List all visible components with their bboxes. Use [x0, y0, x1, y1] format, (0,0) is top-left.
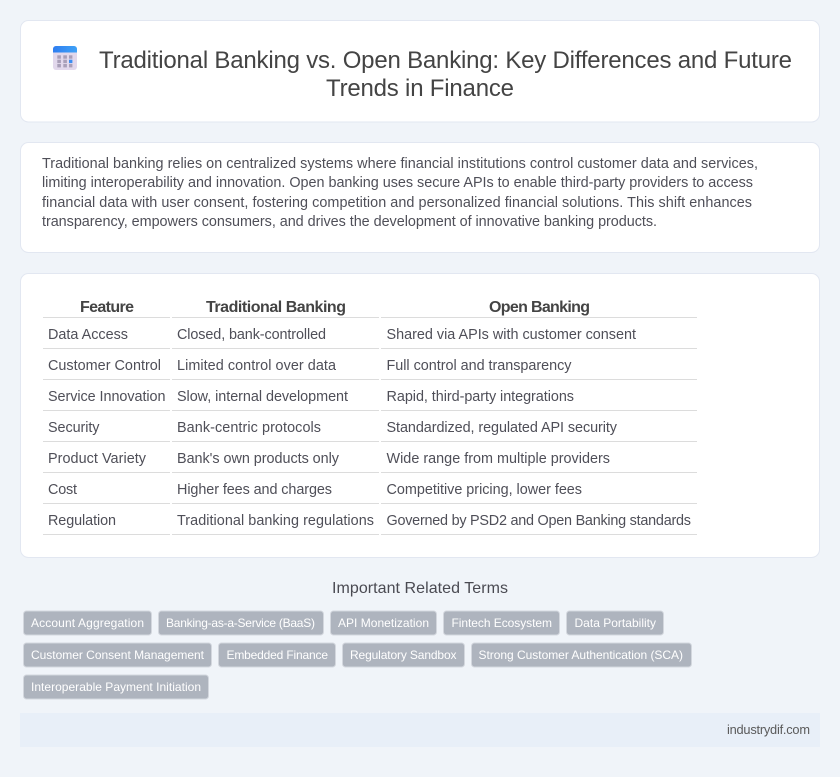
- row: Regulation: Governed by PSD2 and Open Banking standards: [386, 513, 691, 529]
- row: Product Variety: Product Variety: [48, 451, 147, 467]
- row: Security: Standardized, regulated API security: [386, 420, 618, 436]
- row: Regulation: Traditional banking regulations: [177, 513, 374, 529]
- row: Regulation: Regulation: [48, 513, 116, 529]
- heading: related terms: Important Related Terms: [332, 580, 508, 597]
- title: Trends in Finance: [326, 75, 514, 102]
- panel: summary paragraph: [20, 142, 820, 252]
- table header: Open Banking: [489, 299, 590, 316]
- tag: Banking-as-a-Service: Banking-as-a-Service (BaaS): [166, 616, 315, 630]
- row: Service Innovation: [43, 389, 697, 411]
- tag: Embedded Finance: [218, 643, 336, 667]
- row: Service Innovation: Slow, internal development: [177, 389, 348, 405]
- tag: Regulatory Sandbox: Regulatory Sandbox: [350, 648, 456, 662]
- row: Product Variety: [43, 451, 697, 473]
- tag: Fintech Ecosystem: Fintech Ecosystem: [452, 616, 552, 630]
- table header: Traditional Banking: [206, 299, 346, 316]
- summary text: limiting interoperability and innovation. Open banking uses secure APIs to enable third-party providers to access: [42, 175, 753, 191]
- row: Data Access: Shared via APIs with customer consent: [386, 327, 636, 343]
- tag: Strong Customer Authentication: Strong Customer Authentication (SCA): [478, 648, 683, 662]
- row: Cost: Competitive pricing, lower fees: [386, 482, 582, 498]
- row: Service Innovation: Rapid, third-party integrations: [386, 389, 574, 405]
- row: Cost: [43, 482, 697, 504]
- tag: Embedded Finance: Embedded Finance: [226, 648, 328, 662]
- tag: Customer Consent Management: Customer Consent Management: [31, 648, 205, 662]
- row: Data Access: [43, 327, 697, 349]
- row: Cost: Cost: [48, 482, 77, 498]
- panel: comparison table: [20, 274, 820, 558]
- row: Cost: Higher fees and charges: [177, 482, 332, 498]
- table header: Feature: [80, 299, 134, 316]
- row: Customer Control: Customer Control: [48, 358, 161, 374]
- row: Data Access: Closed, bank-controlled: [177, 327, 326, 343]
- summary text: transparency, empowers consumers, and drives the development of innovative banking products.: [42, 214, 657, 230]
- tag: Fintech Ecosystem: [444, 611, 560, 635]
- row: Security: Bank-centric protocols: [177, 420, 321, 436]
- title: [99, 47, 792, 102]
- tag: Strong Customer Authentication: [472, 643, 692, 667]
- tag: Data Portability: [566, 611, 664, 635]
- row: Security: Security: [48, 420, 100, 436]
- summary text: Traditional banking relies on centralized systems where financial institutions control customer data and services,: [42, 156, 758, 172]
- table header: [43, 299, 697, 318]
- tag: API Monetization: API Monetization: [338, 616, 429, 630]
- row: Product Variety: Bank's own products only: [177, 451, 340, 467]
- row: Customer Control: [43, 358, 697, 380]
- tag: API Monetization: [330, 611, 436, 635]
- row: Customer Control: Limited control over data: [177, 358, 336, 374]
- tag: Regulatory Sandbox: [342, 643, 464, 667]
- tag: Customer Consent Management: [24, 643, 212, 667]
- row: Security: [43, 420, 697, 442]
- row: Service Innovation: Service Innovation: [48, 389, 166, 405]
- footer source: industrydif.com: [727, 722, 810, 737]
- row: Product Variety: Wide range from multiple providers: [386, 451, 610, 467]
- header panel: [20, 20, 820, 122]
- row: Regulation: [43, 513, 697, 535]
- tag: Account Aggregation: [24, 611, 152, 635]
- row: Customer Control: Full control and transparency: [386, 358, 572, 374]
- footer bar: [20, 713, 820, 747]
- tag: Data Portability: Data Portability: [574, 616, 656, 630]
- icon: calendar: [53, 46, 77, 70]
- summary text: financial data with user consent, fostering competition and personalized financial solutions. This shift enhances: [42, 195, 752, 211]
- tag: Interoperable Payment Initiation: [24, 675, 208, 699]
- tag: Banking-as-a-Service: [158, 611, 324, 635]
- summary text: [42, 156, 758, 230]
- related terms tags: [24, 611, 692, 699]
- tag: Account Aggregation: Account Aggregation: [31, 616, 144, 630]
- row: Data Access: Data Access: [48, 327, 128, 343]
- tag: Interoperable Payment Initiation: Interoperable Payment Initiation: [31, 680, 201, 694]
- title: Traditional Banking vs. Open Banking: Key Differences and Future: [99, 47, 792, 74]
